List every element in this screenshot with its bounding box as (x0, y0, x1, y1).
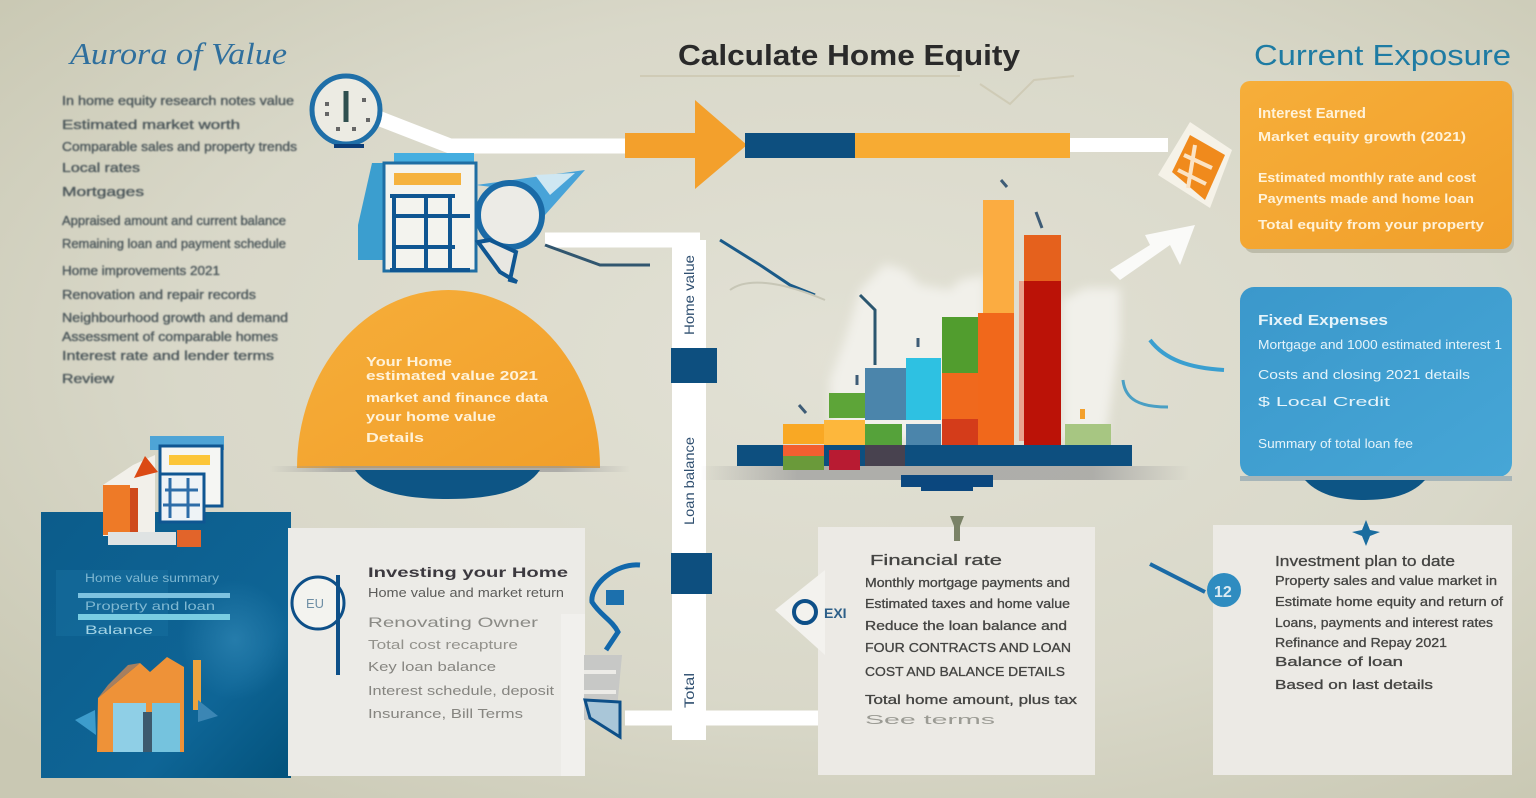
icon: clock (312, 76, 380, 146)
text block: left column introduction: Mortgages (62, 184, 145, 199)
panel: left paper: Home value and market return (368, 585, 564, 600)
chart: tick marks (799, 180, 1042, 413)
text block: left column introduction: Neighbourhood growth and demand (62, 310, 288, 325)
callout: orange panel: Interest Earned (1258, 105, 1366, 122)
text block: left column introduction: Review (62, 371, 115, 386)
text block: left column introduction: Remaining loan and payment schedule (62, 236, 286, 251)
panel: right paper: Based on last details (1275, 677, 1434, 692)
vertical band with labels: Total (681, 673, 697, 708)
vertical band with labels: Loan balance (681, 437, 697, 525)
icon: compass pointer: 12 (1214, 584, 1232, 601)
arrow: white upward arrow (1110, 225, 1195, 280)
callout: orange panel (1240, 81, 1514, 253)
panel: left paper: Investing your Home (368, 564, 568, 580)
icon: left pointer: EXI (824, 605, 847, 621)
semicircle callout: orange: Details (366, 430, 424, 445)
panel: right paper: Balance of loan (1275, 654, 1403, 669)
panel: navy house panel: Home value summary (85, 571, 219, 585)
panel: right paper: Investment plan to date (1275, 553, 1455, 570)
heading: left column title: Aurora of Value (68, 36, 287, 71)
panel: left paper: Key loan balance (368, 659, 496, 674)
icon: house (75, 657, 218, 752)
text block: left column introduction (62, 93, 298, 386)
vertical band with labels (671, 240, 717, 740)
callout: orange panel: Payments made and home loan (1258, 191, 1474, 206)
arrow: bottom connector (625, 710, 945, 726)
heading: main title: Calculate Home Equity (678, 40, 1020, 72)
icon: blue hand and paper stack (584, 565, 640, 737)
panel: centre paper: Reduce the loan balance and (865, 618, 1067, 633)
arrow: blue curved line toward blue panel (1150, 340, 1224, 370)
callout: blue panel: $ Local Credit (1258, 394, 1391, 409)
text block: left column introduction: Estimated market worth (62, 117, 240, 132)
semicircle callout: orange: your home value (366, 409, 496, 424)
panel: right paper (1213, 525, 1512, 775)
icon: pointer badge: EU (306, 596, 324, 611)
text block: left column introduction: Home improvements 2021 (62, 263, 220, 278)
icon: compass pointer (1150, 564, 1241, 607)
semicircle callout: orange (270, 290, 630, 499)
chart: base (737, 445, 1132, 466)
text block: left column introduction: Appraised amount and current balance (62, 213, 286, 228)
panel: centre paper: Estimated taxes and home value (865, 596, 1070, 611)
text block: left column introduction: Local rates (62, 160, 141, 175)
heading: main title (640, 40, 1074, 104)
semicircle callout: orange: market and finance data (366, 390, 549, 405)
panel: right paper: Refinance and Repay 2021 (1275, 635, 1447, 650)
semicircle callout: orange: estimated value 2021 (366, 368, 538, 383)
icon: orange calculator badge (1158, 122, 1232, 208)
panel: left paper (288, 528, 585, 776)
icon: calculator document and magnifier (358, 153, 585, 282)
panel: centre paper: Total home amount, plus tax (865, 692, 1078, 707)
text block: left column introduction: Interest rate and lender terms (62, 348, 275, 363)
panel: left paper: Insurance, Bill Terms (368, 706, 524, 721)
panel: centre paper: COST AND BALANCE DETAILS (865, 664, 1065, 679)
callout: blue panel: Costs and closing 2021 details (1258, 367, 1471, 382)
panel: navy house panel: Balance (85, 623, 153, 637)
chart: stacked bars (783, 200, 1111, 470)
icon: left pointer (775, 570, 847, 655)
panel: centre paper: Monthly mortgage payments and (865, 575, 1070, 590)
panel: navy house panel: Property and loan (85, 599, 215, 613)
panel: right paper: Loans, payments and interest rates (1275, 615, 1494, 630)
text block: left column introduction: Assessment of comparable homes (62, 329, 279, 344)
icon: documents with orange house (103, 436, 224, 547)
timeline arrow: orange arrow and progress bar (625, 100, 1168, 189)
panel: centre paper: See terms (865, 712, 996, 727)
panel: left paper: Total cost recapture (368, 637, 518, 652)
icon: small star (1352, 520, 1380, 546)
panel: left paper: Renovating Owner (368, 614, 538, 630)
icon: pointer badge (292, 575, 344, 675)
callout: blue panel: Mortgage and 1000 estimated interest 1 (1258, 337, 1502, 352)
panel: centre paper (775, 527, 1095, 775)
callout: orange panel: Market equity growth (2021) (1258, 129, 1466, 144)
decorative cloud behind chart (830, 264, 1120, 440)
arrow: curved line to chart (720, 240, 875, 365)
callout: orange panel: Total equity from your property (1258, 217, 1485, 232)
text block: left column introduction: In home equity research notes value (62, 93, 294, 108)
icon: small pointer above centre paper (950, 516, 964, 541)
bar chart (700, 180, 1190, 491)
heading: right column title: Current Exposure (1254, 40, 1511, 72)
callout: blue panel: Fixed Expenses (1258, 312, 1388, 329)
arrow: small blue curve (1123, 380, 1168, 407)
arrow: connector from magnifier to vertical band (545, 240, 700, 265)
panel: left paper: Interest schedule, deposit (368, 683, 554, 698)
chart: shadow (700, 466, 1190, 480)
panel: centre paper: Financial rate (870, 552, 1002, 569)
panel: right paper: Estimate home equity and return of (1275, 594, 1503, 609)
semicircle callout: orange: Your Home (366, 354, 452, 369)
callout: blue panel (1240, 287, 1512, 500)
panel: right paper: Property sales and value market in (1275, 573, 1497, 588)
text block: left column introduction: Comparable sales and property trends (62, 139, 298, 154)
arrow: white connector from clock to timeline (378, 118, 630, 146)
panel: navy house panel (41, 512, 291, 778)
text block: left column introduction: Renovation and repair records (62, 287, 257, 302)
vertical band with labels: Home value (681, 255, 697, 335)
callout: orange panel: Estimated monthly rate and cost (1258, 170, 1477, 185)
callout: blue panel: Summary of total loan fee (1258, 436, 1413, 451)
panel: centre paper: FOUR CONTRACTS AND LOAN (865, 640, 1071, 655)
